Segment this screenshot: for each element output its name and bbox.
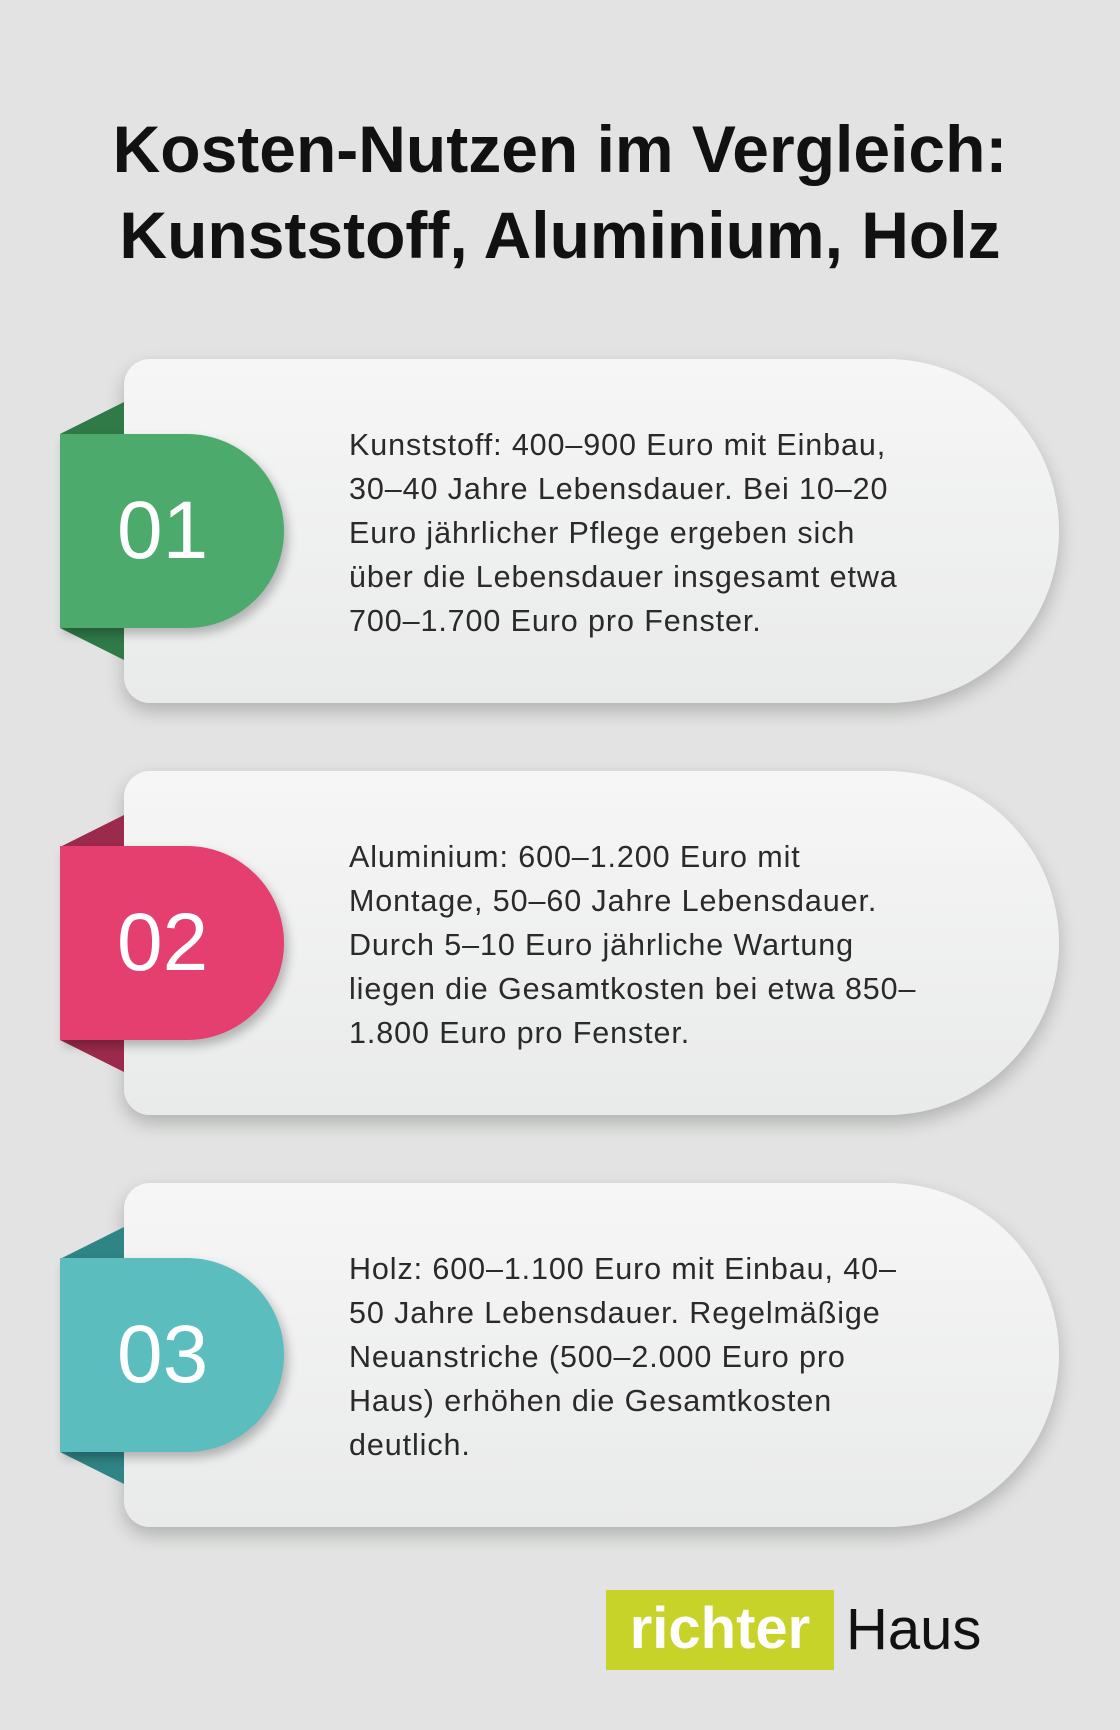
text: Kunststoff: Euro jährlicher Pflege ergeben sich — [349, 516, 855, 550]
number tab 02: 02 — [117, 897, 208, 988]
logo: richter — [630, 1596, 810, 1661]
text: Holz: Holz: 600–1.100 Euro mit Einbau, 40– — [349, 1252, 897, 1286]
fold bottom 1 — [60, 628, 124, 660]
fold top 1 — [60, 402, 124, 434]
logo — [606, 1590, 981, 1670]
number tab 02 — [60, 846, 284, 1040]
fold bottom 3 — [60, 1452, 124, 1484]
text: Aluminium: Durch 5–10 Euro jährliche Wartung — [349, 928, 854, 962]
text: Kunststoff: 700–1.700 Euro pro Fenster. — [349, 604, 762, 638]
text: Aluminium: 1.800 Euro pro Fenster. — [349, 1016, 690, 1050]
text: Aluminium: liegen die Gesamtkosten bei etwa 850– — [349, 972, 916, 1006]
text: Aluminium: Montage, 50–60 Jahre Lebensdauer. — [349, 884, 877, 918]
panel: Kunststoff — [124, 359, 1059, 703]
number tab 01 — [60, 434, 284, 628]
text: Kunststoff: über die Lebensdauer insgesamt etwa — [349, 560, 898, 594]
fold bottom 2 — [60, 1040, 124, 1072]
title: Kosten-Nutzen im Vergleich: — [113, 112, 1007, 186]
text: Holz: deutlich. — [349, 1428, 471, 1462]
number tab 01: 01 — [117, 485, 208, 576]
text: Holz — [349, 1252, 897, 1462]
text: Aluminium — [349, 840, 916, 1050]
text: Holz: Haus) erhöhen die Gesamtkosten — [349, 1384, 832, 1418]
text: Holz: 50 Jahre Lebensdauer. Regelmäßige — [349, 1296, 881, 1330]
number tab 03: 03 — [117, 1309, 208, 1400]
title: Kunststoff, Aluminium, Holz — [119, 198, 1001, 272]
text: Aluminium: Aluminium: 600–1.200 Euro mit — [349, 840, 801, 874]
text: Kunststoff: Kunststoff: 400–900 Euro mit Einbau, — [349, 428, 886, 462]
fold top 2 — [62, 815, 124, 846]
text: Kunststoff: 30–40 Jahre Lebensdauer. Bei 10–20 — [349, 472, 888, 506]
text: Holz: Neuanstriche (500–2.000 Euro pro — [349, 1340, 846, 1374]
fold top 3 — [62, 1227, 124, 1258]
number tab 03 — [60, 1258, 284, 1452]
logo: Haus — [846, 1597, 981, 1662]
panel: Aluminium — [124, 771, 1059, 1115]
panel: Holz — [124, 1183, 1059, 1527]
title — [113, 112, 1007, 272]
text: Kunststoff — [349, 428, 898, 638]
